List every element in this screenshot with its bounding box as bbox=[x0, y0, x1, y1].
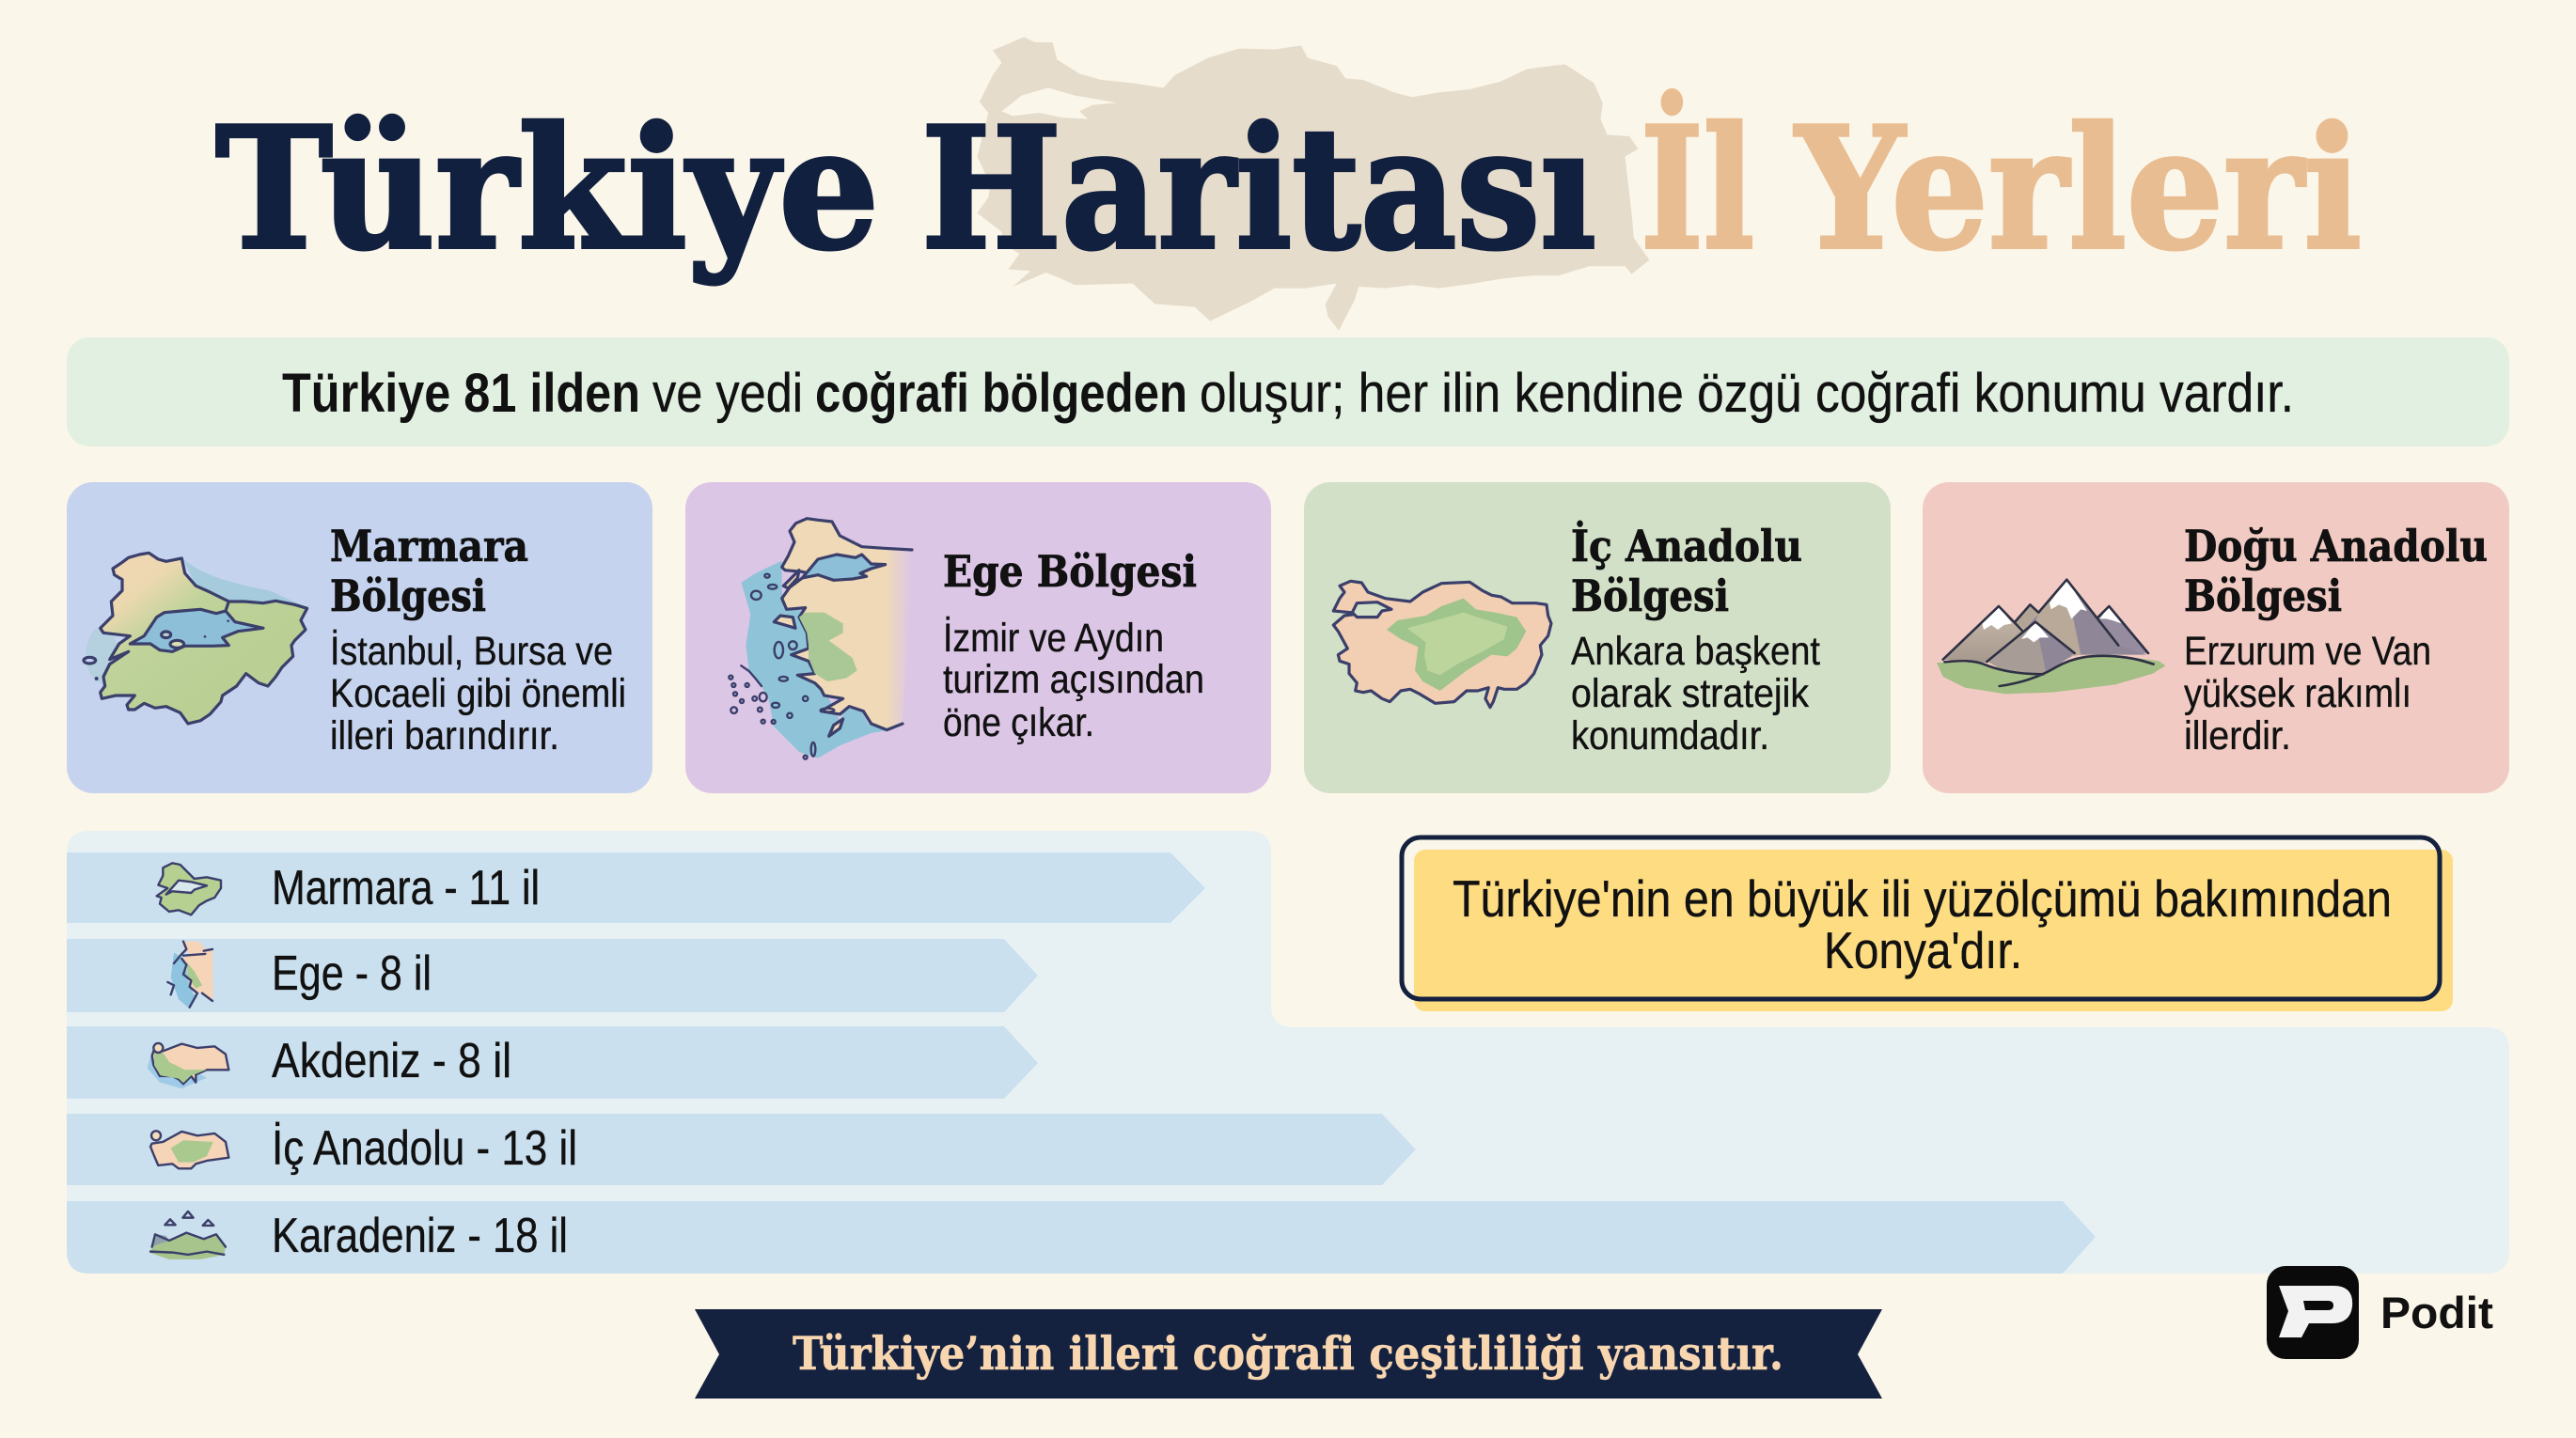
icon: Podit mark bbox=[2267, 1266, 2359, 1359]
heading bbox=[2184, 521, 2488, 621]
intro banner: Türkiye 81 ilden bbox=[282, 363, 640, 424]
label: Ege - 8 il bbox=[272, 946, 432, 1001]
panel: il counts bar chart bbox=[67, 831, 2509, 1274]
panel: Ege Bölgesi bbox=[685, 482, 1271, 793]
heading: Marmara bbox=[330, 521, 528, 571]
icon: Marmara map bbox=[84, 553, 307, 724]
description: İzmir ve Aydın bbox=[943, 616, 1164, 661]
heading: Bölgesi bbox=[330, 571, 486, 621]
ribbon: conclusion bbox=[695, 1309, 1882, 1399]
bar: Karadeniz bbox=[67, 1201, 2096, 1274]
panel: Marmara Bölgesi bbox=[67, 482, 652, 793]
bar: İç Anadolu bbox=[67, 1114, 1416, 1185]
icon: Akdeniz mini map bbox=[148, 1043, 228, 1088]
icon: İç Anadolu mini map bbox=[150, 1131, 228, 1168]
heading: Bölgesi bbox=[1571, 571, 1729, 621]
description: konumdadır. bbox=[1571, 713, 1769, 758]
intro banner: oluşur; her ilin kendine özgü coğrafi konumu vardır. bbox=[1200, 363, 2294, 424]
description: Kocaeli gibi önemli bbox=[330, 671, 626, 716]
description: illerdir. bbox=[2184, 713, 2291, 758]
title: Yerleri bbox=[1794, 90, 2362, 287]
intro banner: coğrafi bölgeden bbox=[815, 363, 1187, 424]
description: illeri barındırır. bbox=[330, 713, 559, 758]
callout: Konya: Konya'dır. bbox=[1824, 921, 2022, 979]
icon: Ege map bbox=[729, 519, 912, 759]
panel: İç Anadolu Bölgesi bbox=[1304, 482, 1891, 793]
heading: Doğu Anadolu bbox=[2184, 521, 2488, 571]
bar: Akdeniz bbox=[67, 1026, 1038, 1099]
logo: Podit bbox=[2267, 1266, 2493, 1359]
heading bbox=[1571, 520, 1802, 621]
bar: Marmara bbox=[67, 852, 1205, 923]
bar: Ege bbox=[67, 939, 1038, 1012]
ribbon: conclusion: Türkiye’nin illeri coğrafi çeşitliliği yansıtır. bbox=[793, 1326, 1783, 1381]
heading: Ege Bölgesi bbox=[943, 546, 1197, 597]
description: turizm açısından bbox=[943, 657, 1204, 702]
description: Erzurum ve Van bbox=[2184, 629, 2431, 674]
label: Karadeniz - 18 il bbox=[272, 1209, 568, 1263]
heading: Bölgesi bbox=[2184, 571, 2342, 621]
heading: İç Anadolu bbox=[1571, 520, 1802, 571]
icon: Marmara mini map bbox=[157, 863, 221, 914]
panel: Doğu Anadolu Bölgesi bbox=[1923, 482, 2509, 793]
title: Haritası bbox=[921, 90, 1596, 287]
icon: Karadeniz mini map bbox=[150, 1211, 226, 1259]
description: Ankara başkent bbox=[1571, 629, 1820, 674]
callout: Konya: Türkiye'nin en büyük ili yüzölçümü bakımından bbox=[1453, 869, 2392, 928]
description: öne çıkar. bbox=[943, 700, 1094, 745]
wordmark: Podit bbox=[2380, 1288, 2493, 1337]
label: İç Anadolu - 13 il bbox=[272, 1121, 577, 1176]
icon: Ege mini map bbox=[167, 942, 213, 1008]
title: İl bbox=[1641, 89, 1754, 287]
title bbox=[215, 89, 2362, 287]
description bbox=[943, 616, 1204, 745]
icon: mountains bbox=[1937, 580, 2165, 694]
description bbox=[1571, 629, 1820, 758]
intro banner bbox=[67, 337, 2509, 446]
heading bbox=[330, 521, 528, 621]
callout: Konya bbox=[1402, 837, 2453, 1011]
background map of Türkiye bbox=[977, 37, 1649, 331]
label: Akdeniz - 8 il bbox=[272, 1034, 511, 1088]
icon: İç Anadolu map bbox=[1333, 581, 1551, 708]
description: olarak stratejik bbox=[1571, 671, 1809, 716]
label: Marmara - 11 il bbox=[272, 861, 540, 915]
description bbox=[330, 629, 626, 758]
description: yüksek rakımlı bbox=[2184, 671, 2411, 716]
intro banner: ve yedi bbox=[652, 363, 803, 424]
description bbox=[2184, 629, 2431, 758]
description: İstanbul, Bursa ve bbox=[330, 629, 613, 674]
title: Türkiye bbox=[215, 90, 879, 287]
